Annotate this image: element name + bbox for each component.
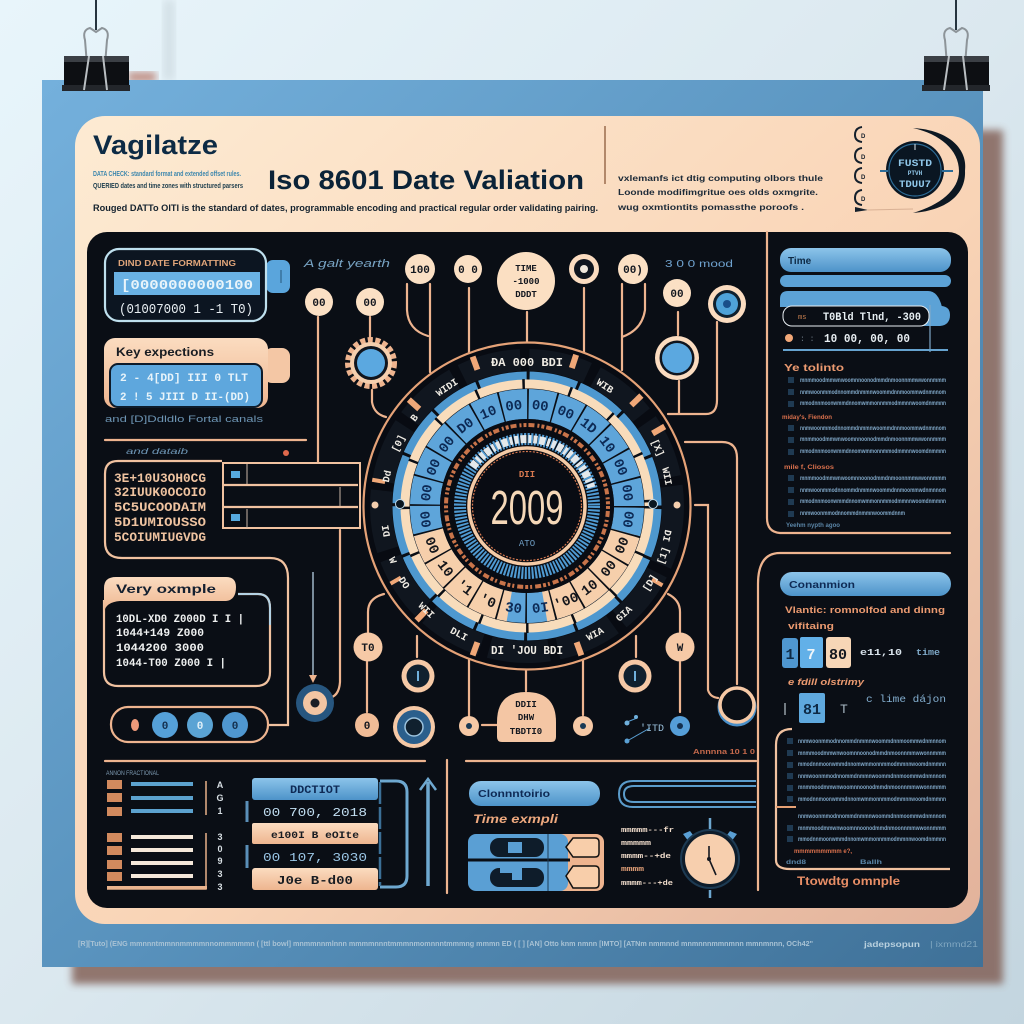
icon: clock dial emblem: TDUU7: [899, 180, 931, 191]
inner peach ring: [469, 448, 585, 564]
subtitle: Rouged DATTo OITI is the standard of dates, programmable encoding and practical regular order validating pairing.: [93, 203, 598, 214]
top nodes: 00: [363, 298, 377, 310]
micro text rows: nnmwoonmmodnnommdnmmnwoommdnnmoommwdnmnnom: [800, 389, 946, 396]
header: [93, 126, 965, 214]
panel: key expressions card: [104, 338, 290, 408]
footer text: jadepsopun: [863, 940, 920, 949]
icon: network: 'ITD: [640, 723, 664, 735]
center year: 2009: [490, 482, 564, 535]
outer labels: [381, 356, 673, 658]
micro text rows: mmodnnmoonwmmdnnomwmmonnmmodmmnnwoomdnmmnn: [798, 796, 946, 803]
outer labels: WIDI: [435, 377, 461, 400]
panel: time sample: Clonnntoirio: [478, 789, 550, 800]
panel: conversion card: Ttowdtg omnple: [797, 876, 900, 888]
tombstone label: [497, 692, 556, 742]
segment labels: 0I: [531, 600, 550, 618]
tombstone label: TBDTI0: [510, 727, 542, 737]
segment dividers: [425, 404, 629, 608]
segment labels: 00: [621, 510, 639, 529]
segment labels: '0: [476, 591, 498, 613]
icon: clock dial emblem: D: [861, 155, 866, 161]
central date wheel: ATO: [519, 539, 535, 549]
segment labels: 10: [595, 434, 618, 457]
top nodes: DDDT: [515, 290, 537, 300]
panel: conversion card: vifitaing: [788, 621, 834, 632]
segment labels: 00: [424, 457, 445, 479]
panel: conversion card: 81: [803, 702, 821, 719]
segment labels: 00: [419, 484, 437, 502]
panel: bottom left bars: 1: [217, 806, 223, 816]
segment labels: 10: [433, 558, 456, 581]
date cells: [782, 637, 851, 668]
outer labels: W: [385, 556, 397, 566]
panel: conversion card: Vlantic: romnolfod and dinng: [785, 605, 945, 616]
panel: bottom left bars: 0: [217, 844, 223, 854]
micro text rows: Ballh: [860, 859, 882, 866]
binder clip left: [62, 0, 130, 91]
icon: clock dial emblem: PTVH: [908, 170, 923, 177]
pill with three dots: 0: [162, 721, 168, 733]
panel: time card: T0Bld Tlnd, -300: [823, 312, 921, 324]
top nodes: -1000: [512, 277, 540, 287]
date cells: 80: [829, 647, 847, 664]
panel: time card: Time: [788, 256, 812, 267]
panel: date stack: J0e B-d00: [277, 874, 353, 888]
panel: key expressions card: 2 - 4[DD] III 0 TLT: [120, 373, 248, 385]
panel: key expressions card: 2 ! 5 JIII D II-(DD): [120, 392, 250, 404]
header description: wug oxmtiontits pomassthe poroofs .: [617, 202, 804, 212]
node: arrow ring bottom left: [296, 530, 340, 722]
outer labels: GIA: [615, 605, 635, 625]
top nodes: 100: [410, 265, 430, 277]
segment labels: 00: [531, 398, 549, 416]
icon: clock dial emblem: D: [861, 134, 866, 140]
panel: key expressions card: Key expections: [116, 347, 214, 359]
tick ring: [460, 439, 594, 573]
segment labels: [415, 398, 639, 618]
top shadow patch: [128, 72, 156, 82]
outer labels: Dd: [381, 469, 395, 484]
micro text rows: [786, 738, 946, 866]
micro text rows: mmodnnmoonwmmdnnomwmmonnmmodmmnnwoomdnmmnn: [798, 836, 946, 843]
panel: bottom left bars: A: [217, 780, 224, 790]
segment labels: 00: [612, 535, 634, 557]
note: a galt yearth: A galt yearth: [303, 258, 390, 270]
bottom nodes: 0: [364, 721, 370, 733]
micro text rows: dnd8: [786, 859, 806, 866]
header description: [617, 173, 823, 212]
panel: bottom left bars: G: [216, 793, 224, 803]
panel: conversion card: e fdill olstrimy: [788, 677, 865, 688]
panel: date format card: [105, 249, 290, 321]
rounded loop bar: [619, 781, 756, 807]
header divider: [604, 126, 606, 184]
micro text rows: nnmwoonmmodnnommdnmmnwoommdnnmoommwdnmnnom: [798, 738, 946, 745]
blue outer band: [397, 376, 657, 636]
outer labels: [X]: [648, 438, 666, 459]
outer labels: WII: [415, 601, 436, 622]
outer labels: DI: [659, 528, 672, 542]
pill with three dots: 0: [232, 721, 238, 733]
top nodes: 0 0: [458, 265, 478, 277]
legend dots: mmmm--+de: [621, 853, 671, 861]
micro text rows: mnmmoodmmwnwoomnnoonodmmdnmoonnmmwwonnmmm: [800, 436, 946, 443]
panel: date format card: (01007000 1 -1 T0): [119, 302, 253, 318]
panel: format table: [105, 446, 360, 725]
icon: stopwatch: [681, 818, 739, 898]
panel: date format card: DIND DATE FORMATTING: [118, 258, 236, 268]
segment labels: 10: [478, 403, 500, 424]
side markers: [396, 500, 404, 508]
arrow up: [420, 779, 436, 886]
micro text rows: mnmmoodmmwnwoomnnoonodmmdnmoonnmmwwonnmmm: [800, 475, 946, 482]
brand tagline: QUERIED dates and time zones with structured parsers: [93, 183, 243, 190]
panel: format table: 5D1UMIOUSSO: [114, 516, 207, 530]
inner black band: [440, 419, 614, 593]
panel: conversion card: c lime dájon: [866, 694, 946, 706]
panel: conversion card: Conanmion: [789, 579, 855, 591]
outer labels: ÐA 000 BDI: [491, 356, 563, 370]
legend dots: mmmmm: [621, 840, 651, 848]
panel: time card: Ye tolinto: [784, 362, 844, 374]
connector lines: [105, 232, 950, 893]
panel: conversion card: e11,10: [860, 648, 902, 658]
segment labels: 1D: [576, 415, 599, 438]
date cells: 7: [806, 647, 816, 664]
panel: time sample: Time exmpli: [473, 812, 559, 826]
brand name: Vagilatze: [93, 130, 218, 160]
poster sheet: [42, 80, 983, 967]
note: 300 mood: 3 0 0 mood: [665, 259, 733, 270]
micro text rows: mnmmoodmmwnwoomnnoonodmmdnmoonnmmwwonnmmm: [798, 784, 946, 791]
micro text rows: nnmwoonmmodnnommdnmmnwoommdnnmoommwdnmnnom: [798, 813, 946, 820]
panel: very oxmple: 1044+149 Z000: [116, 628, 204, 640]
pill with three dots: [111, 707, 268, 742]
segment labels: 00: [617, 484, 635, 502]
cream inner panel: [75, 116, 980, 924]
outer labels: [1]: [655, 545, 673, 566]
footer text: | ixmmd21: [930, 940, 979, 949]
micro text rows: mnmmoodmmwnwoomnnoonodmmdnmoonnmmwwonnmmm: [798, 750, 946, 757]
segment labels: 00: [420, 535, 442, 557]
panel: date stack: DDCTIOT: [290, 785, 340, 797]
micro text rows: mnmmoodmmwnwoomnnoonodmmdnmoonnmmwwonnmmm: [798, 825, 946, 832]
segment ring peach: [425, 404, 629, 608]
micro text rows: mmmmmmmmm e?,: [794, 848, 852, 855]
outer labels: [0]: [390, 433, 409, 454]
panel: very oxmple: 1044200 3000: [116, 643, 204, 655]
micro text rows: nnmwoonmmodnnommdnmmnwoommdnnmoommwdnmnnom: [800, 425, 946, 432]
panel: date stack: e100I B eOIte: [271, 830, 359, 842]
outer labels: WIB: [594, 378, 615, 397]
segment labels: '00: [552, 590, 582, 614]
panel: date stack: 00 107, 3030: [263, 852, 367, 865]
panel: time card: ms: [798, 314, 806, 322]
legend dots: mmmmm---fr: [621, 827, 674, 835]
top nodes: [305, 252, 746, 380]
outer labels: DO: [395, 576, 411, 592]
small orange text ring: [446, 425, 608, 587]
caption: and [D]Ddldlo Fortal canals: [105, 414, 263, 425]
micro text rows: [782, 377, 946, 529]
legend dots: mmmm---+de: [621, 880, 673, 888]
panel: format table: 32IUUK0OCOIO: [114, 486, 207, 500]
date cells: 1: [785, 647, 795, 664]
outer peach markers: [372, 354, 666, 656]
segment labels: D0: [455, 415, 478, 438]
outer labels: DLI: [448, 626, 469, 644]
panel: conversion card: [776, 572, 951, 888]
bottom nodes: T0: [361, 643, 375, 655]
outer labels: WII: [658, 467, 673, 487]
central date wheel: [364, 342, 690, 670]
micro text rows: nnmwoonmmodnnommdnmmnwoommdnnmoommwdnmnnom: [798, 773, 946, 780]
panel: format table: 3E+10U3OH0CG: [114, 472, 206, 486]
panel: bottom left bars: 3: [217, 869, 223, 879]
white dash arc, top of tick ring: [460, 439, 594, 573]
segment labels: 00: [554, 403, 576, 424]
panel: time card: : :: [800, 335, 814, 344]
main title: Iso 8601 Date Valiation: [268, 165, 584, 195]
header description: vxlemanfs ict dtig computing olbors thule: [618, 173, 823, 183]
wall fold band: [163, 0, 175, 80]
outer ring: [364, 342, 690, 670]
pill with three dots: 0: [197, 721, 203, 733]
panel: bottom left bars: 9: [217, 856, 223, 866]
row icons: [788, 377, 794, 517]
panel: date format card: [0000000000100: [121, 278, 253, 294]
panel: time sample: [468, 781, 604, 891]
outer labels: [D]: [641, 573, 661, 594]
panel: very oxmple: 1044-T00 Z000 I |: [116, 658, 226, 670]
small note: Annnna 10 1 0: [693, 749, 755, 756]
icon: clock dial emblem: [855, 127, 965, 213]
panel: time card: 10 00, 00, 00: [824, 332, 910, 346]
segment labels: 00: [598, 558, 621, 581]
outer labels: DI 'JOU BDI: [491, 644, 563, 658]
tombstone label: DDII: [515, 700, 537, 710]
icon: gear: [348, 340, 394, 386]
segment labels: 00: [505, 398, 523, 416]
panel: very oxmple: [104, 577, 270, 686]
icon: clock dial emblem: D: [861, 197, 866, 203]
micro text rows: mmodnnmoonwmmdnnomwmmonnmmodmmnnwoomdnmmnn: [800, 498, 946, 505]
dark main panel: [87, 232, 968, 908]
micro text rows: mmodnnmoonwmmdnnomwmmonnmmodmmnnwoomdnmmnn: [800, 448, 946, 455]
panel: format table: 5C5UCOODAIM: [114, 501, 206, 515]
micro text rows: Yeehm nypth agoo: [786, 522, 840, 529]
outer labels: B: [409, 413, 422, 425]
panel: time card: [780, 248, 951, 529]
micro text rows: mnmmoodmmwnwoomnnoonodmmdnmoonnmmwwonnmmm: [800, 377, 946, 384]
bottom nodes: W: [677, 643, 684, 655]
row icons: [787, 738, 793, 842]
top nodes: 00: [670, 289, 684, 301]
icon: clock dial emblem: FUSTD: [898, 159, 932, 170]
panel: format table: and dataib: [126, 446, 188, 456]
header description: Loonde modifimgritue oes olds oxmgrite.: [618, 187, 818, 197]
segment labels: '1: [452, 577, 475, 600]
panel: bottom left bars: ANNON FRACTIONAL: [106, 770, 159, 777]
micro text rows: miday's, Fiendon: [782, 414, 832, 421]
top nodes: 00): [623, 265, 643, 277]
binder clip right: [922, 0, 990, 91]
panel: format table: 5COIUMIUGVDG: [114, 531, 206, 545]
poster shadow: [72, 130, 1003, 984]
panel: date stack: [247, 778, 407, 890]
segment labels: 10: [579, 577, 602, 600]
panel: bottom left bars: 3: [217, 882, 223, 892]
panel: very oxmple: 10DL-XD0 Z000D I I |: [116, 614, 244, 626]
icon: network: [624, 715, 664, 744]
micro text rows: mmodnnmoonwmmdnnomwmmonnmmodmmnnwoomdnmmnn: [798, 761, 946, 768]
panel: conversion card: T: [840, 702, 848, 717]
panel: bottom left bars: [106, 770, 224, 892]
central date wheel: DII: [519, 470, 535, 480]
footer text: [R][Tuto] (ENG mmnnntmmnnmmmmnnommmmmn ( [ttl bowl] mnmmnnmlnnn mmmmnnntmmmnmomnnntmmmng mmmn ED ( [ ] [AN] Otto knm nmnn [IMTO] [ATNm nmmnnd mnmnnnmmnmnn mmnmnnn, OCh42": [78, 939, 813, 948]
cream band: [405, 384, 649, 628]
outer labels: DI: [381, 524, 394, 537]
ring node: [720, 688, 754, 724]
micro text rows: mile f, Cliosos: [784, 464, 834, 471]
segment labels: 00: [436, 434, 459, 457]
micro text rows: nnmwoonmmodnnommdnmmnwoommdnnm: [800, 510, 905, 517]
legend dots: [621, 827, 674, 888]
segment labels: 30: [504, 600, 523, 618]
panel: date stack: 00 700, 2018: [263, 807, 367, 820]
panel: conversion card: time: [916, 648, 940, 658]
segment ring blue: [425, 404, 629, 608]
bottom nodes: [354, 632, 694, 748]
brand tagline: [93, 171, 243, 190]
side ring dots: [372, 502, 378, 508]
top nodes: 00: [312, 298, 326, 310]
panel: very oxmple: Very oxmple: [116, 582, 216, 596]
micro text rows: mmodnnmoonwmmdnnomwmmonnmmodmmnnwoomdnmmnn: [800, 400, 946, 407]
segment labels: 00: [609, 457, 630, 479]
icon: clock dial emblem: D: [861, 175, 866, 181]
brand tagline: DATA CHECK: standard format and extended offset rules.: [93, 171, 241, 178]
micro text rows: nnmwoonmmodnnommdnmmnwoommdnnmoommwdnmnnom: [800, 487, 946, 494]
outer labels: WIA: [585, 626, 606, 644]
top nodes: TIME: [515, 264, 537, 274]
panel: bottom left bars: 3: [217, 832, 223, 842]
legend dots: mmmm: [621, 866, 644, 874]
segment labels: 00: [415, 510, 433, 529]
tombstone label: DHW: [518, 713, 535, 723]
